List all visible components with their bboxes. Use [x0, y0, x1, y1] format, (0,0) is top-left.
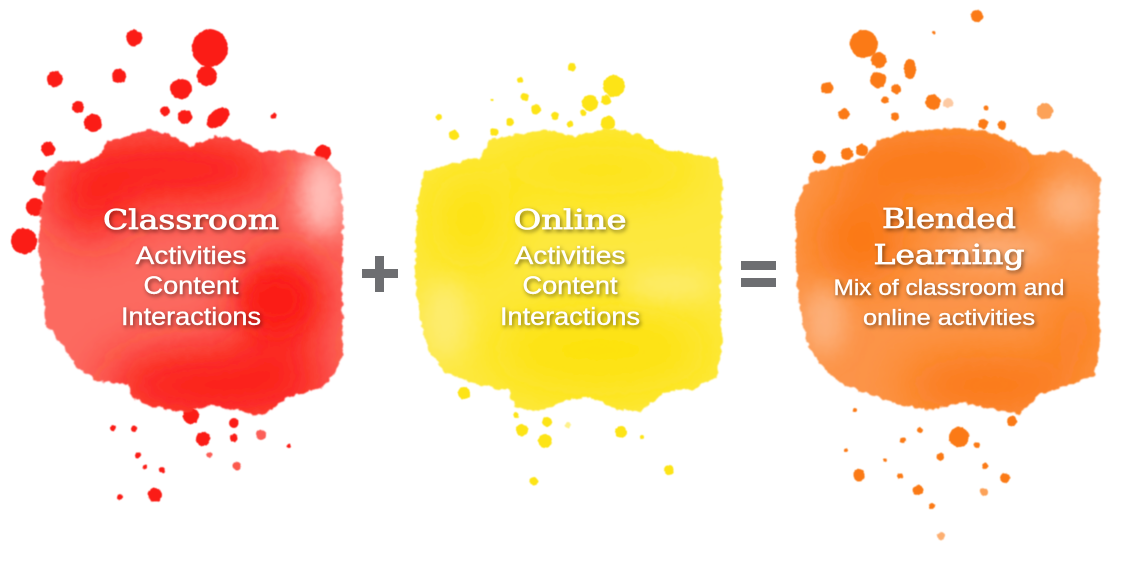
- icon: plus sign: [362, 256, 398, 292]
- text: classroom items: Interactions: [121, 303, 261, 331]
- panel: blended learning: [780, 10, 1120, 540]
- icon: orange paint splatter: [812, 10, 1053, 540]
- orange paint wash: [794, 126, 1102, 416]
- icon: red paint splatter: [11, 29, 331, 502]
- text: classroom items: Activities: [136, 242, 246, 270]
- heading: Online: Online: [514, 205, 626, 236]
- red paint wash: [37, 128, 346, 417]
- panel: online: [400, 63, 740, 485]
- heading: Classroom: Classroom: [103, 205, 279, 236]
- icon: yellow paint splatter: [436, 63, 674, 485]
- text: blended description: [834, 275, 1064, 330]
- heading: Blended Learning: Learning: [874, 240, 1024, 271]
- text: classroom items: [121, 242, 261, 331]
- text: blended description: Mix of classroom and: [834, 275, 1064, 300]
- text: blended description: online activities: [863, 305, 1035, 330]
- panel: classroom: [11, 29, 360, 502]
- text: online items: Activities: [514, 242, 626, 270]
- heading: Blended Learning: [874, 204, 1024, 271]
- text: online items: [500, 242, 640, 331]
- heading: Blended Learning: Blended: [882, 204, 1016, 235]
- text: classroom items: Content: [144, 272, 239, 300]
- icon: equals sign: [741, 261, 776, 287]
- text: online items: Content: [522, 272, 618, 300]
- yellow paint wash: [413, 127, 724, 414]
- text: online items: Interactions: [500, 303, 640, 331]
